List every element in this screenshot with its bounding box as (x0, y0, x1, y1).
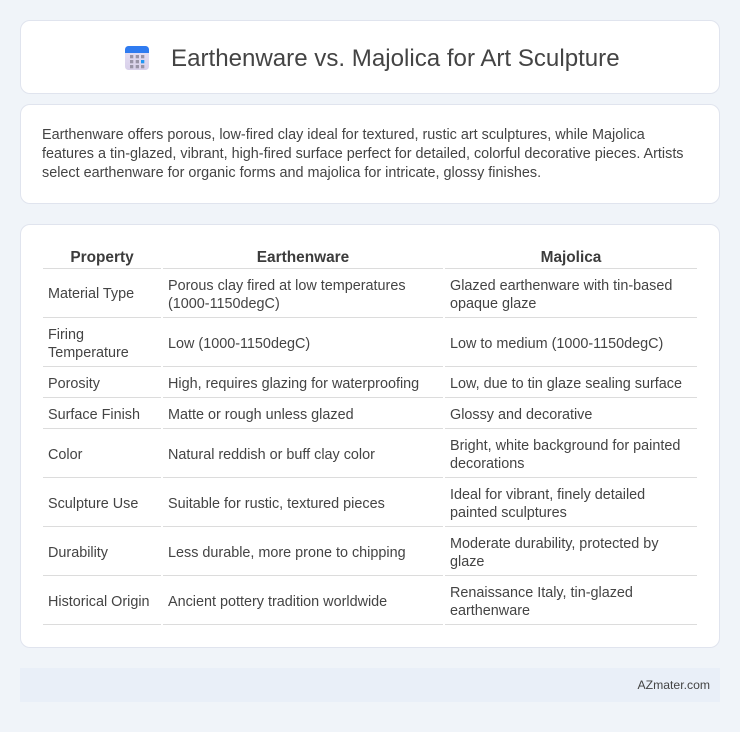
row: Material Type (48, 278, 672, 312)
header: Majolica: Majolica (541, 249, 601, 266)
row: Historical Origin: earthenware (450, 603, 530, 619)
row: Material Type: Glazed earthenware with tin-based (450, 278, 672, 294)
title panel (20, 20, 720, 94)
row: Porosity: High, requires glazing for waterproofing (168, 376, 419, 392)
row: Material Type: Porous clay fired at low temperatures (168, 278, 406, 294)
row: Surface Finish: Surface Finish (48, 407, 140, 423)
row: Firing Temperature: Low to medium (1000-1150degC) (450, 336, 663, 352)
icon: calendar (125, 46, 149, 70)
row: Durability: Durability (48, 545, 108, 561)
footer bar (20, 668, 720, 702)
row: Historical Origin: Renaissance Italy, tin-glazed (450, 585, 633, 601)
row: Material Type: (1000-1150degC) (168, 296, 280, 312)
row: Durability: Less durable, more prone to chipping (168, 545, 406, 561)
row: Firing Temperature: Firing (48, 327, 84, 343)
row: Porosity: Porosity (48, 376, 100, 392)
row: Color (48, 438, 680, 472)
row: Firing Temperature: Low (1000-1150degC) (168, 336, 310, 352)
header: Property: Property (70, 249, 134, 266)
row: Sculpture Use: Ideal for vibrant, finely detailed (450, 487, 645, 503)
intro text: select earthenware for organic forms and majolica for intricate, glossy finishes. (42, 165, 541, 181)
intro panel (20, 104, 720, 204)
row: Durability: glaze (450, 554, 484, 570)
footer: AZmater.com: AZmater.com (638, 678, 710, 692)
row: Durability (48, 536, 659, 570)
row: Surface Finish: Matte or rough unless glazed (168, 407, 354, 423)
table panel (20, 224, 720, 648)
row: Firing Temperature: Temperature (48, 345, 129, 361)
row: Surface Finish: Glossy and decorative (450, 407, 592, 423)
row: Porosity (48, 376, 682, 392)
intro text (42, 127, 684, 181)
row: Historical Origin (48, 585, 633, 619)
row: Color: Bright, white background for painted (450, 438, 680, 454)
row: Surface Finish (48, 407, 592, 423)
row: Porosity: Low, due to tin glaze sealing surface (450, 376, 682, 392)
intro text: features a tin-glazed, vibrant, high-fired surface perfect for detailed, colorful decorative pieces. Artists (42, 146, 684, 162)
row: Color: decorations (450, 456, 524, 472)
row: Sculpture Use: Sculpture Use (48, 496, 138, 512)
row: Color: Color (48, 447, 82, 463)
intro text: Earthenware offers porous, low-fired clay ideal for textured, rustic art sculptures, while Majolica (42, 127, 645, 143)
row: Historical Origin: Historical Origin (48, 594, 150, 610)
row: Material Type: opaque glaze (450, 296, 536, 312)
title: Earthenware vs. Majolica for Art Sculpture (171, 45, 620, 72)
row: Sculpture Use: painted sculptures (450, 505, 567, 521)
header: Earthenware: Earthenware (257, 249, 349, 266)
row: Sculpture Use (48, 487, 645, 521)
row: Color: Natural reddish or buff clay color (168, 447, 375, 463)
row: Firing Temperature (48, 327, 663, 361)
row: Sculpture Use: Suitable for rustic, textured pieces (168, 496, 385, 512)
row: Historical Origin: Ancient pottery tradition worldwide (168, 594, 387, 610)
row: Durability: Moderate durability, protected by (450, 536, 659, 552)
row: Material Type: Material Type (48, 286, 134, 302)
